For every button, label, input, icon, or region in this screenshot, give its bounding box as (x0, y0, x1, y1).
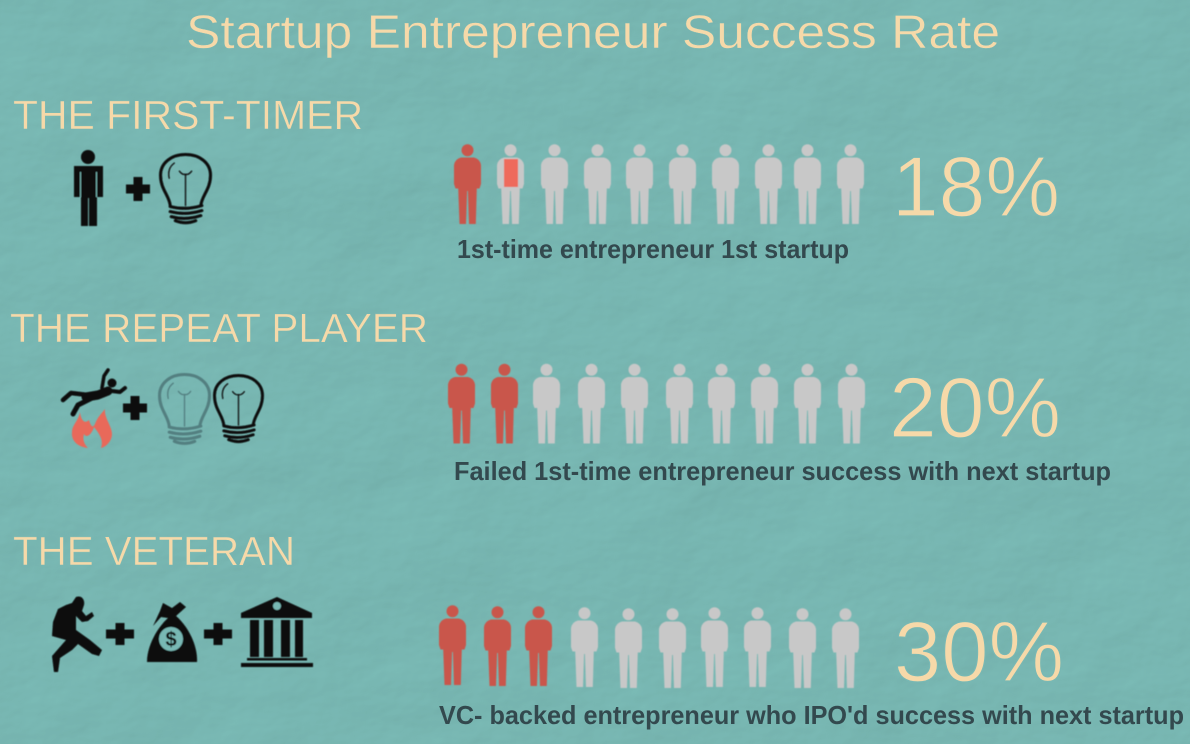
panel: the veteran (13, 528, 1184, 730)
caption: veteran: VC- backed entrepreneur who IPO'd success with next startup (439, 700, 1184, 730)
icon: money bag (147, 602, 197, 662)
caption: first-timer: 1st-time entrepreneur 1st startup (457, 234, 849, 264)
icon: flame (72, 409, 112, 448)
panel: the first-timer (13, 92, 1060, 264)
statistic: 30%: 30% (894, 605, 1064, 700)
icon: person plus light bulb (74, 150, 211, 226)
panel: the repeat player (10, 305, 1111, 486)
icon: running man (52, 597, 102, 672)
heading: the veteran: THE VETERAN (13, 528, 295, 574)
icon: money bag: $ (165, 629, 177, 651)
heading: the first-timer: THE FIRST-TIMER (13, 92, 363, 138)
heading: the repeat player: THE REPEAT PLAYER (10, 305, 428, 351)
icon: falling person, fire, plus and two bulbs (63, 370, 262, 448)
title: Startup Entrepreneur Success Rate (186, 5, 1000, 58)
caption: repeat player: Failed 1st-time entrepreneur success with next startup (454, 456, 1111, 486)
icon: running man, money bag and bank (52, 597, 313, 672)
icon: plus (204, 623, 232, 645)
icon: falling person (63, 370, 125, 414)
icon: bank (241, 597, 313, 667)
pictogram row: 18 percent (454, 144, 864, 224)
icon: plus (106, 623, 134, 645)
pictogram row: 20 percent (448, 364, 865, 444)
statistic: 20%: 20% (889, 361, 1061, 456)
pictogram row: 30 percent (439, 605, 859, 688)
statistic: 18%: 18% (892, 140, 1060, 235)
